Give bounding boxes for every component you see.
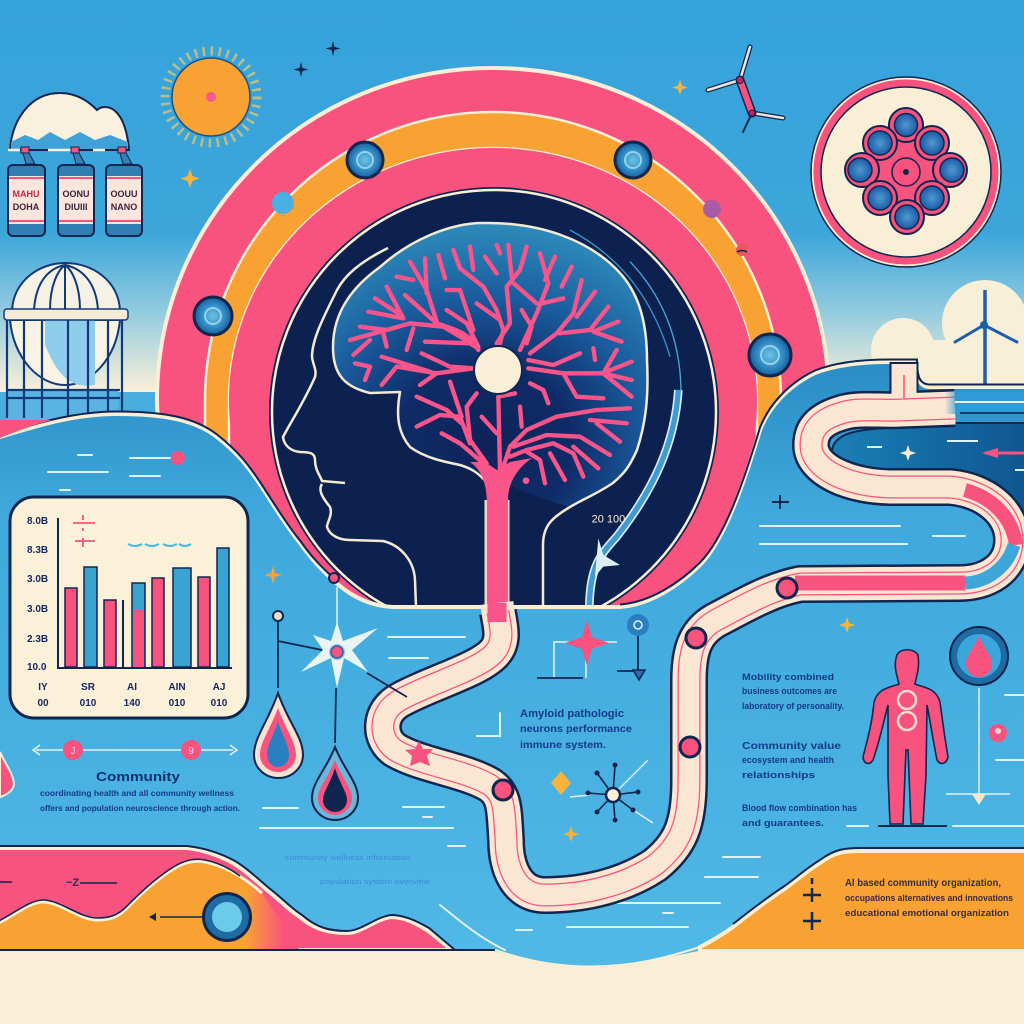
y labels: 3.0B [27, 574, 48, 585]
ribbon nodes [405, 578, 797, 800]
y labels: 8.3B [27, 545, 48, 556]
brain fill [333, 223, 648, 507]
text blocks: right column [742, 672, 857, 829]
y labels: 10.0 [27, 662, 47, 673]
x labels: 010 [80, 698, 97, 709]
pink wedge at the left edge [0, 420, 52, 438]
pink neuron tree in the brain [350, 245, 632, 483]
text block: bottom right [845, 877, 1013, 919]
y labels: 2.3B [27, 634, 48, 645]
x labels: AI [127, 682, 137, 693]
axes [58, 518, 232, 668]
icon: wind turbine top right [708, 47, 783, 132]
arch nodes [194, 142, 791, 376]
x labels: 010 [211, 698, 228, 709]
text block: bottom right: Al based community organization, [845, 877, 1001, 889]
x labels: IY [38, 682, 48, 693]
orange ring in the arch [205, 112, 781, 480]
x labels [37, 682, 228, 709]
dark head circle [269, 187, 719, 637]
icon: glass dome water tower [4, 263, 128, 420]
icon: cross diagram with pink star [537, 614, 649, 680]
faint blue caption lines above the ribbon: community wellness information [285, 853, 410, 862]
text blocks: right column: and guarantees. [742, 818, 824, 829]
text blocks: right column: ecosystem and health [742, 755, 834, 766]
text block: community [40, 770, 240, 813]
icon: cloud over bottles [8, 93, 129, 150]
icon: layered drops [0, 693, 358, 820]
sparkles in the sky [180, 41, 688, 188]
sky background [0, 0, 1024, 520]
text block: community: offers and population neuroscience through action. [40, 803, 240, 813]
blue swoosh and label on the right of the head: 20 100 [592, 514, 625, 526]
dark small cross on the water [772, 495, 789, 509]
timeline with two pink nodes: 9 [188, 746, 194, 757]
icon: three labelled bottles: MAHU [12, 189, 40, 199]
x labels: SR [81, 682, 96, 693]
faint blue caption lines above the ribbon: population system overview [320, 877, 431, 886]
horizon water block on the left [0, 392, 156, 432]
text block: middle: immune system. [520, 739, 606, 751]
panel: pink outer arch [157, 68, 829, 620]
landscape dark outline [0, 360, 1024, 604]
cream neuron nucleus [474, 346, 522, 394]
x labels: 010 [169, 698, 186, 709]
bars [65, 548, 229, 667]
y labels: 3.0B [27, 604, 48, 615]
text block: middle: Amyloid pathologic [520, 708, 624, 720]
icon: sun [165, 51, 257, 143]
icon: radial neuron with sparkles [551, 617, 855, 842]
icon: three labelled bottles: DIUIII [64, 202, 88, 212]
head and brain outlines [283, 223, 648, 607]
x labels: 140 [124, 698, 141, 709]
chart legend marks [73, 515, 95, 547]
icon: human figure [863, 650, 948, 826]
panel: bar chart [10, 497, 248, 718]
text block: middle: neurons performance [520, 723, 632, 735]
panel: bottom left pink and orange hills: ~Z [66, 877, 79, 889]
icon: three labelled bottles [8, 147, 142, 236]
panel: cell rosette medallion [811, 77, 1001, 267]
lobe outline below the landscape [495, 947, 700, 967]
faint blue caption lines above the ribbon [285, 853, 431, 886]
panel: bottom left pink and orange hills [0, 846, 495, 950]
y labels: 8.0B [27, 516, 48, 527]
x labels: 00 [37, 698, 49, 709]
icon: three labelled bottles: OOUU [110, 189, 138, 199]
text blocks: right column: relationships [742, 770, 815, 781]
text blocks: right column: Blood flow combination has [742, 803, 857, 814]
icon: three labelled bottles: NANO [111, 202, 137, 212]
x labels: AJ [213, 682, 225, 693]
pink inner band in the arch [229, 148, 757, 600]
icon: three labelled bottles: OONU [62, 189, 90, 199]
text block: bottom right: educational emotional organization [845, 908, 1009, 919]
panel: blue landscape [0, 362, 1024, 1024]
water stripes on the right horizon [945, 392, 1024, 414]
icon: neuron star diagram [264, 566, 407, 743]
neuron trunk [470, 458, 532, 625]
text block: middle [520, 708, 632, 751]
text blocks: right column: Mobility combined [742, 672, 834, 683]
panel: bottom right orange hill [700, 848, 1024, 951]
panel: bottom cream strip [0, 947, 1024, 1024]
text blocks: right column: laboratory of personality. [742, 701, 844, 712]
cream clouds and wind turbine on the right horizon [871, 280, 1024, 390]
timeline with two pink nodes [33, 740, 237, 760]
text block: community: coordinating health and all community wellness [40, 788, 234, 798]
white dashes on the water [48, 455, 1024, 950]
path ribbon winding from brain to horizon [383, 362, 1016, 895]
text blocks: right column: business outcomes are [742, 686, 837, 697]
small pink dot on the water [171, 451, 185, 465]
blue swoosh and label on the right of the head [570, 230, 681, 607]
icon: three labelled bottles: DOHA [13, 202, 40, 212]
panel: right lake [832, 423, 1024, 535]
timeline with two pink nodes: J [70, 746, 76, 757]
x labels: AIN [168, 682, 186, 693]
icon: blood drop badge with stem [946, 627, 1010, 805]
text block: community: Community [96, 770, 180, 784]
text blocks: right column: Community value [742, 740, 841, 752]
y labels [27, 516, 48, 673]
